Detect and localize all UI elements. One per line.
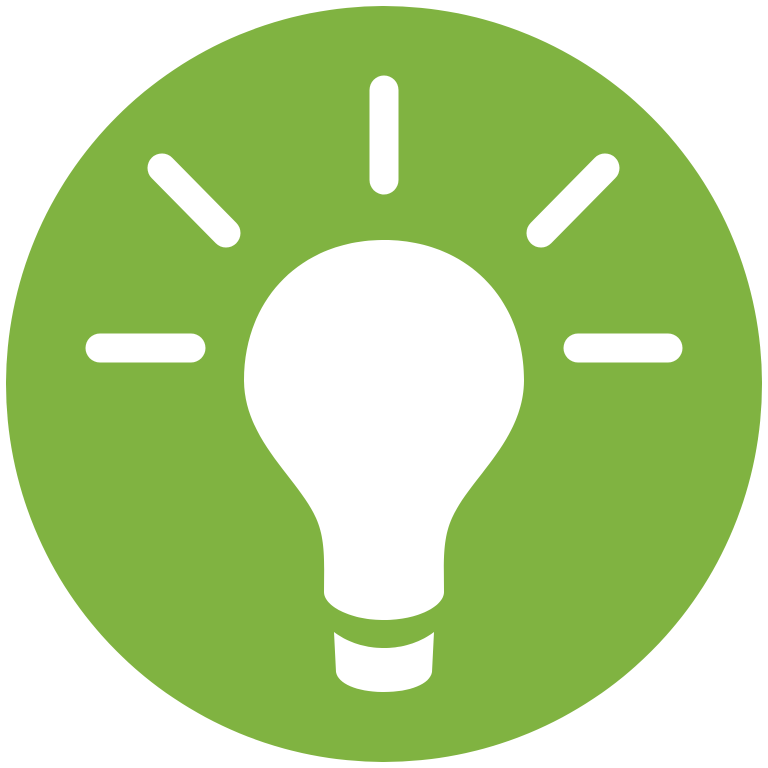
bulb base [334,632,434,692]
bulb [244,240,524,620]
rays [100,90,668,348]
